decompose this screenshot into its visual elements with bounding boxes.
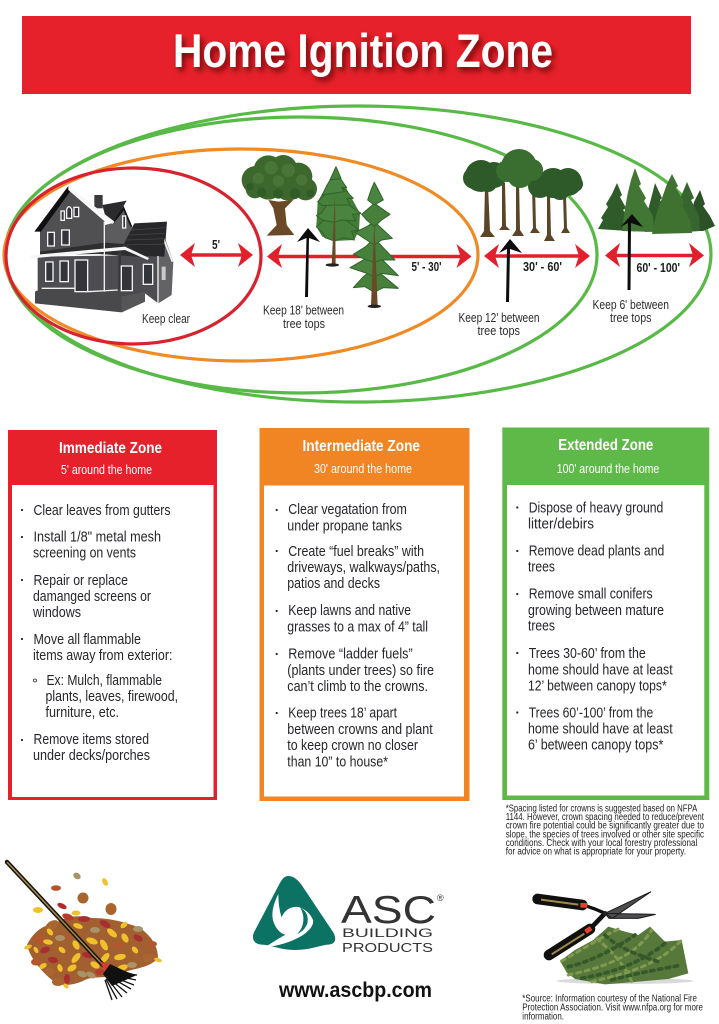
list: intermediate zone actions: can’t climb to the crowns. — [287, 679, 428, 695]
heading: immediate zone: Immediate Zone — [59, 440, 162, 457]
icon: small pine — [316, 167, 361, 267]
list: intermediate zone actions: Keep trees 18’ apart — [288, 706, 397, 722]
list: immediate zone actions — [21, 503, 178, 764]
panel: extended zone — [502, 428, 709, 800]
list: intermediate zone actions: (plants under trees) so fire — [287, 663, 434, 679]
list: immediate zone actions: plants, leaves, firewood, — [46, 689, 178, 705]
icon: tall pine — [350, 182, 398, 308]
list: intermediate zone actions — [276, 502, 440, 770]
title banner — [22, 16, 691, 94]
diagram captions: tree tops — [283, 316, 325, 331]
list: immediate zone actions: Move all flammable — [34, 632, 141, 648]
list: intermediate zone actions: grasses to a max of 4” tall — [287, 620, 428, 636]
distance labels: 5' — [212, 238, 220, 252]
list: extended zone actions: 12’ between canopy tops* — [528, 678, 667, 694]
list: extended zone actions: Trees 60’-100’ from the — [529, 705, 653, 721]
distance labels: 30' - 60' — [523, 260, 562, 274]
list: immediate zone actions: under decks/porches — [33, 748, 150, 764]
list: immediate zone actions: furniture, etc. — [46, 705, 119, 721]
list: immediate zone actions: Remove items stored — [34, 732, 149, 748]
list: extended zone actions: Remove dead plants and — [529, 543, 664, 559]
icon: conifer group — [598, 168, 715, 234]
icon: shears and shrub — [538, 892, 693, 984]
list: intermediate zone actions: to keep crown no closer — [287, 738, 418, 754]
subheading: 100 feet: 100' around the home — [557, 462, 659, 476]
diagram captions: tree tops — [478, 323, 520, 338]
diagram captions: Keep 12' between — [458, 310, 540, 325]
logo wordmark: ® — [437, 893, 444, 903]
list: intermediate zone actions: between crowns and plant — [287, 722, 433, 738]
logo wordmark: BUILDING — [342, 926, 433, 940]
website url: www.ascbp.com — [278, 978, 432, 1002]
source note — [522, 994, 703, 1022]
panel: immediate zone — [8, 430, 217, 800]
diagram captions: Keep 6' between — [592, 297, 669, 312]
arrows: tree top spacing — [297, 214, 643, 302]
list: extended zone actions — [516, 500, 673, 754]
list: extended zone actions: Trees 30-60’ from the — [529, 646, 646, 662]
logo wordmark: ASC — [341, 889, 436, 932]
diagram captions: Keep 18' between — [263, 302, 344, 318]
list: extended zone actions: growing between mature — [528, 603, 664, 619]
icon: deciduous tree group — [463, 149, 583, 241]
heading: extended zone: Extended Zone — [558, 437, 654, 454]
list: intermediate zone actions: driveways, walkways/paths, — [287, 560, 440, 576]
diagram captions — [142, 297, 669, 338]
distance labels: 60' - 100' — [636, 261, 680, 275]
diagram captions: tree tops — [610, 310, 652, 325]
list: intermediate zone actions: than 10” to house* — [287, 754, 388, 770]
list: intermediate zone actions: Keep lawns and native — [288, 603, 411, 619]
icon: house — [30, 186, 173, 312]
list: intermediate zone actions: Clear vegatation from — [288, 502, 407, 518]
logo mark — [253, 876, 335, 950]
list: extended zone actions: litter/debirs — [528, 516, 594, 532]
list: intermediate zone actions: Create “fuel breaks” with — [288, 544, 424, 560]
list: immediate zone actions: damanged screens or — [33, 589, 151, 605]
icon: oak tree — [242, 155, 317, 236]
logo: ASC Building Products — [253, 876, 444, 955]
list: immediate zone actions: Repair or replace — [34, 573, 128, 589]
list: extended zone actions: Dispose of heavy ground — [529, 500, 663, 516]
list: immediate zone actions: items away from exterior: — [33, 648, 172, 664]
list: extended zone actions: Remove small conifers — [529, 587, 653, 603]
arrows: distance markers — [180, 243, 704, 268]
list: intermediate zone actions: under propane tanks — [287, 518, 402, 534]
subheading: 30 feet: 30' around the home — [314, 462, 412, 476]
source note: information. — [522, 1011, 564, 1022]
distance labels: 5' - 30' — [412, 260, 442, 274]
logo wordmark — [341, 889, 444, 955]
panel: intermediate zone — [260, 428, 470, 801]
list: intermediate zone actions: patios and decks — [287, 576, 380, 592]
title: Home Ignition Zone — [173, 24, 553, 77]
list: extended zone actions: home should have at least — [528, 722, 673, 738]
list: immediate zone actions: windows — [32, 605, 81, 621]
list: immediate zone actions: Ex: Mulch, flammable — [46, 673, 162, 689]
list: extended zone actions: home should have at least — [528, 662, 673, 678]
list: immediate zone actions: Install 1/8" metal mesh — [34, 530, 161, 546]
list: extended zone actions: trees — [528, 619, 555, 635]
list: extended zone actions: trees — [528, 560, 555, 576]
logo wordmark: PRODUCTS — [342, 940, 433, 955]
diagram captions: Keep clear — [142, 311, 191, 326]
list: intermediate zone actions: Remove “ladder fuels” — [288, 646, 413, 662]
heading: intermediate zone: Intermediate Zone — [302, 438, 420, 455]
distance labels — [212, 238, 680, 275]
zone rings — [4, 106, 711, 402]
list: extended zone actions: 6’ between canopy tops* — [528, 738, 664, 754]
footnote: crown spacing — [506, 804, 704, 857]
list: immediate zone actions: Clear leaves from gutters — [34, 503, 170, 519]
icon: rake and leaves — [7, 862, 162, 1000]
subheading: 5 feet: 5' around the home — [61, 463, 152, 477]
list: immediate zone actions: screening on vents — [33, 546, 136, 562]
